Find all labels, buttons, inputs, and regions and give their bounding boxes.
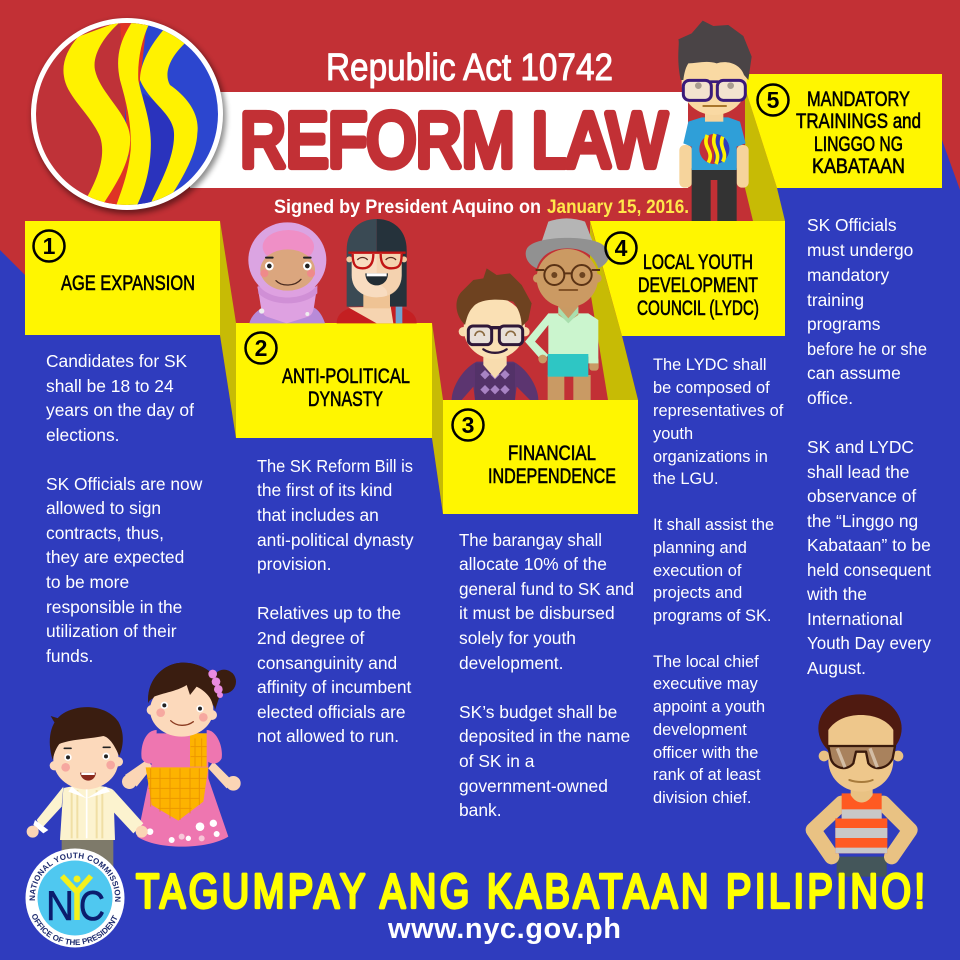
box 4 number and heading: DEVELOPMENT [638, 274, 758, 297]
subtitle: signing date: January 15, 2016. [547, 197, 689, 218]
text block: column 4: programs of SK. [653, 607, 771, 625]
text block: column 4: representatives of [653, 402, 784, 420]
text block: column 2: not allowed to run. [257, 726, 399, 746]
text block: column 5: shall lead the [807, 462, 909, 482]
text block: column 4: appoint a youth [653, 698, 765, 716]
text block: column 3: deposited in the name [459, 726, 630, 746]
text block: column 4 [653, 356, 784, 807]
text block: column 5: observance of [807, 486, 916, 506]
text block: column 2: consanguinity and [257, 653, 397, 673]
text block: column 2: elected officials are [257, 702, 406, 722]
title: REFORM LAW: REFORM LAW [240, 97, 667, 183]
text block: column 4: rank of at least [653, 766, 761, 784]
box 5 number and heading: 5 [767, 87, 780, 113]
text block: column 3: The barangay shall [459, 530, 602, 550]
text block: column 1: utilization of their [46, 621, 177, 641]
text block: column 4: the LGU. [653, 470, 719, 488]
character: girl in hijab [248, 222, 326, 323]
text block: column 4: organizations in [653, 448, 768, 466]
text block: column 3: solely for youth [459, 628, 576, 648]
box 4 number and heading: LOCAL YOUTH [643, 251, 753, 274]
text block: column 2: affinity of incumbent [257, 677, 412, 697]
panel: box 3 financial independence [443, 400, 638, 514]
text block: column 5: the “Linggo ng [807, 511, 918, 531]
text block: column 1: allowed to sign [46, 498, 161, 518]
panel: box 1 age expansion: AGE EXPANSION [61, 272, 195, 295]
panel: box 3 financial independence: INDEPENDENCE [488, 465, 616, 488]
panel: box 5 yellow [745, 74, 942, 188]
fold shades between steps [220, 88, 785, 514]
text block: column 3: government-owned [459, 776, 608, 796]
text block: column 1: shall be 18 to 24 [46, 376, 174, 396]
title band [190, 92, 688, 188]
character: boy in barong [27, 707, 148, 873]
text block: column 5: Kabataan” to be [807, 535, 931, 555]
SK logo [30, 15, 230, 215]
subtitle: signing date: Signed by President Aquino on [274, 197, 541, 218]
panel: box 2 anti-political dynasty: DYNASTY [308, 388, 383, 411]
logo: National Youth Commission: OFFICE OF THE PRESIDENT [32, 914, 118, 946]
text block: column 4: youth [653, 425, 693, 443]
box 5 number and heading: KABATAAN [812, 155, 905, 178]
text block: column 4: be composed of [653, 379, 770, 397]
text block: column 4: The LYDC shall [653, 356, 767, 374]
text block: column 2: anti-political dynasty [257, 530, 414, 550]
text block: column 1: funds. [46, 646, 93, 666]
panel: box 1 age expansion [25, 221, 220, 335]
panel: box 2 anti-political dynasty [236, 323, 432, 438]
text block: column 5: before he or she [807, 339, 927, 359]
text block: column 2: 2nd degree of [257, 628, 365, 648]
box 5 number and heading: TRAININGS and [796, 110, 921, 133]
panel: box 2 anti-political dynasty: 2 [255, 335, 267, 361]
text block: column 1: years on the day of [46, 400, 194, 420]
text block: column 5: Youth Day every [807, 633, 931, 653]
text block: column 4: It shall assist the [653, 516, 774, 534]
text block: column 2 [257, 456, 414, 746]
text block: column 2: that includes an [257, 505, 379, 525]
text block: column 5: office. [807, 388, 853, 408]
text block: column 2: Relatives up to the [257, 603, 401, 623]
text block: column 5: programs [807, 314, 881, 334]
subtitle: signing date [274, 197, 689, 218]
text block: column 1 [46, 351, 203, 666]
text block: column 2: provision. [257, 554, 331, 574]
character: old man with hat [525, 218, 609, 400]
text block: column 2: the first of its kind [257, 480, 392, 500]
character: girl in pink Filipiniana [122, 663, 241, 847]
text block: column 5: mandatory [807, 265, 889, 285]
text block: column 4: development [653, 721, 747, 739]
box 4 number and heading [606, 232, 759, 320]
text block: column 3: allocate 10% of the [459, 554, 607, 574]
text block: column 5: SK and LYDC [807, 437, 914, 457]
panel: box 2 anti-political dynasty: ANTI-POLITICAL [282, 365, 410, 388]
text block: column 5: International [807, 609, 903, 629]
text block: column 5: August. [807, 658, 866, 678]
panel: box 3 financial independence: FINANCIAL [508, 442, 596, 465]
text block: column 3: it must be disbursed [459, 603, 615, 623]
text block: column 1: they are expected [46, 547, 184, 567]
box 4 number and heading: COUNCIL (LYDC) [637, 297, 759, 320]
text block: column 4: The local chief [653, 653, 759, 671]
logo: National Youth Commission [26, 848, 124, 948]
text block: column 5: training [807, 290, 864, 310]
box 4 number and heading: 4 [615, 235, 628, 261]
text block: column 3: development. [459, 653, 563, 673]
text block: column 4: officer with the [653, 744, 758, 762]
text block: column 5: with the [806, 584, 867, 604]
text block: column 1: responsible in the [46, 597, 182, 617]
box 5 number and heading: LINGGO NG [814, 133, 903, 156]
text block: column 1: to be more [46, 572, 129, 592]
logo: National Youth Commission: N [46, 882, 74, 929]
text block: column 1: Candidates for SK [46, 351, 188, 371]
character: boy with brown hair [452, 268, 538, 400]
panel: box 3 financial independence: 3 [462, 412, 474, 438]
box 5 number and heading: MANDATORY [807, 88, 910, 111]
text block: column 5: must undergo [807, 240, 913, 260]
logo: National Youth Commission: NATIONAL YOUTH COMMISSION [30, 852, 121, 902]
text block: column 5: can assume [807, 363, 901, 383]
text block: column 4: execution of [653, 562, 742, 580]
text block: column 5 [806, 215, 931, 678]
text block: column 3: general fund to SK and [459, 579, 634, 599]
text block: column 5: held consequent [807, 560, 931, 580]
text block: column 3: bank. [459, 800, 502, 820]
text block: column 2: The SK Reform Bill is [257, 456, 413, 476]
text block: column 5: SK Officials [807, 215, 897, 235]
character: top boy in SK shirt [678, 21, 752, 221]
box 5 number and heading [758, 84, 921, 178]
text block: column 3: SK’s budget shall be [459, 702, 617, 722]
panel: box 1 age expansion: 1 [43, 233, 56, 259]
panel: box 4 yellow [590, 221, 785, 336]
text block: column 3 [459, 530, 634, 820]
text block: column 4: projects and [653, 584, 742, 602]
heading: Republic Act 10742: Republic Act 10742 [326, 47, 613, 89]
text block: column 1: contracts, thus, [46, 523, 164, 543]
character: woman with red glasses [337, 219, 417, 323]
text block: column 4: division chief. [653, 789, 751, 807]
text block: column 3: of SK in a [459, 751, 535, 771]
text block: column 4: planning and [653, 539, 747, 557]
text block: column 4: executive may [653, 675, 759, 693]
slogan: Tagumpay ang Kabataang Pilipino: TAGUMPAY ANG KABATAAN PILIPINO! [136, 864, 925, 919]
logo: National Youth Commission: C [79, 882, 105, 929]
website url: www.nyc.gov.ph [387, 913, 621, 945]
character: man with sunglasses [813, 694, 910, 877]
text block: column 1: elections. [46, 425, 119, 445]
text block: column 1: SK Officials are now [46, 474, 203, 494]
